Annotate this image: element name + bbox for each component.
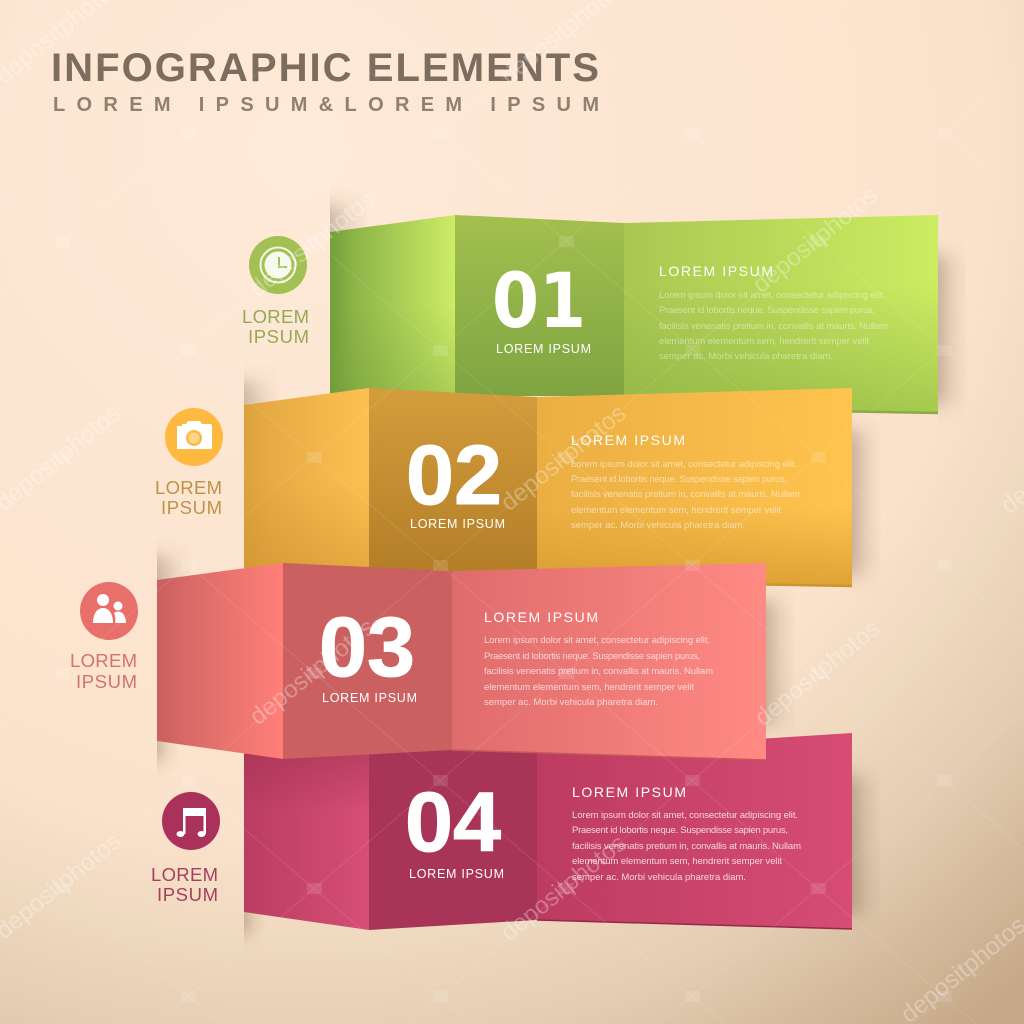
body text: Lorem ipsum dolor sit amet, consectetur adipiscing elit. [484, 635, 710, 646]
number 04: 04 [405, 775, 501, 869]
icon label 01: IPSUM [248, 326, 309, 347]
icon label 03: IPSUM [76, 671, 137, 692]
panel: step 01 [330, 215, 938, 413]
watermark text: depositphotos [245, 614, 380, 731]
body text: Praesent id lobortis neque. Suspendisse sapien purus, [571, 474, 787, 485]
heading: LOREM IPSUM [572, 784, 686, 800]
icon: camera [165, 408, 223, 466]
label: LOREM IPSUM [410, 517, 505, 531]
body text [659, 290, 888, 362]
body text: elementum elementum sem, hendrerit semper velit [571, 505, 781, 516]
body text: facilisis venenatis pretium in, convallis at mauris. Nullam [484, 666, 713, 677]
body text: Praesent id lobortis neque. Suspendisse sapien purus, [659, 305, 875, 316]
icon label 04: IPSUM [157, 884, 218, 905]
body text: facilisis venenatis pretium in, convallis at mauris. Nullam [572, 841, 801, 852]
body text: Lorem ipsum dolor sit amet, consectetur adipiscing elit. [571, 459, 797, 470]
watermark text: depositphotos [496, 400, 631, 517]
shadows behind the panels [157, 205, 968, 933]
watermark text: depositphotos [245, 186, 380, 303]
body text: semper ac. Morbi vehicula pharetra diam. [484, 697, 658, 708]
icon: people [80, 582, 138, 640]
icon: music note [162, 792, 220, 850]
heading: LOREM IPSUM [659, 263, 773, 279]
number 02: 02 [406, 428, 502, 522]
body text: facilisis venenatis pretium in, convallis at mauris. Nullam [571, 489, 800, 500]
icon label 01: LOREM [242, 306, 309, 327]
body text: facilisis venenatis pretium in, convallis at mauris. Nullam [659, 321, 888, 332]
icon label 02: IPSUM [161, 497, 222, 518]
icon label 04: LOREM [151, 864, 218, 885]
watermark text: depositphotos [748, 182, 883, 299]
icon label 01 [242, 306, 309, 347]
icon label 02 [155, 477, 222, 518]
watermark text: depositphotos [750, 615, 885, 732]
number 03: 03 [319, 600, 415, 694]
heading: LOREM IPSUM [571, 432, 685, 448]
heading: LOREM IPSUM [484, 609, 598, 625]
watermark camera marks [55, 128, 952, 1002]
body text: semper ac. Morbi vehicula pharetra diam. [572, 872, 746, 883]
body text: elementum elementum sem, hendrerit semper velit [572, 856, 782, 867]
icon label 03: LOREM [70, 650, 137, 671]
body text: Lorem ipsum dolor sit amet, consectetur adipiscing elit. [572, 810, 798, 821]
panel: step 03 [157, 563, 766, 760]
body text: Lorem ipsum dolor sit amet, consectetur adipiscing elit. [659, 290, 885, 301]
body text: elementum elementum sem, hendrerit semper velit [659, 336, 869, 347]
icon label 04 [151, 864, 218, 905]
icon label 02: LOREM [155, 477, 222, 498]
body text [484, 635, 713, 708]
title: INFOGRAPHIC ELEMENTS [51, 46, 601, 90]
label: LOREM IPSUM [496, 342, 591, 356]
body text: elementum elementum sem, hendrerit semper velit [484, 682, 694, 693]
body text [571, 459, 800, 531]
body text: semper ac. Morbi vehicula pharetra diam. [571, 520, 745, 531]
watermark text: depositphotos [496, 830, 631, 947]
number 01: 01 [492, 256, 586, 345]
icon label 03 [70, 650, 137, 692]
body text: Praesent id lobortis neque. Suspendisse sapien purus, [572, 825, 788, 836]
panel: step 02 [244, 388, 852, 586]
panel: step 04 [244, 733, 852, 930]
body text: semper ac. Morbi vehicula pharetra diam. [659, 351, 833, 362]
subtitle: LOREM IPSUM&LOREM IPSUM [53, 94, 599, 116]
label: LOREM IPSUM [409, 867, 504, 881]
label: LOREM IPSUM [322, 691, 417, 705]
body text [572, 810, 801, 883]
icon: clock [249, 236, 307, 294]
body text: Praesent id lobortis neque. Suspendisse sapien purus, [484, 651, 700, 662]
